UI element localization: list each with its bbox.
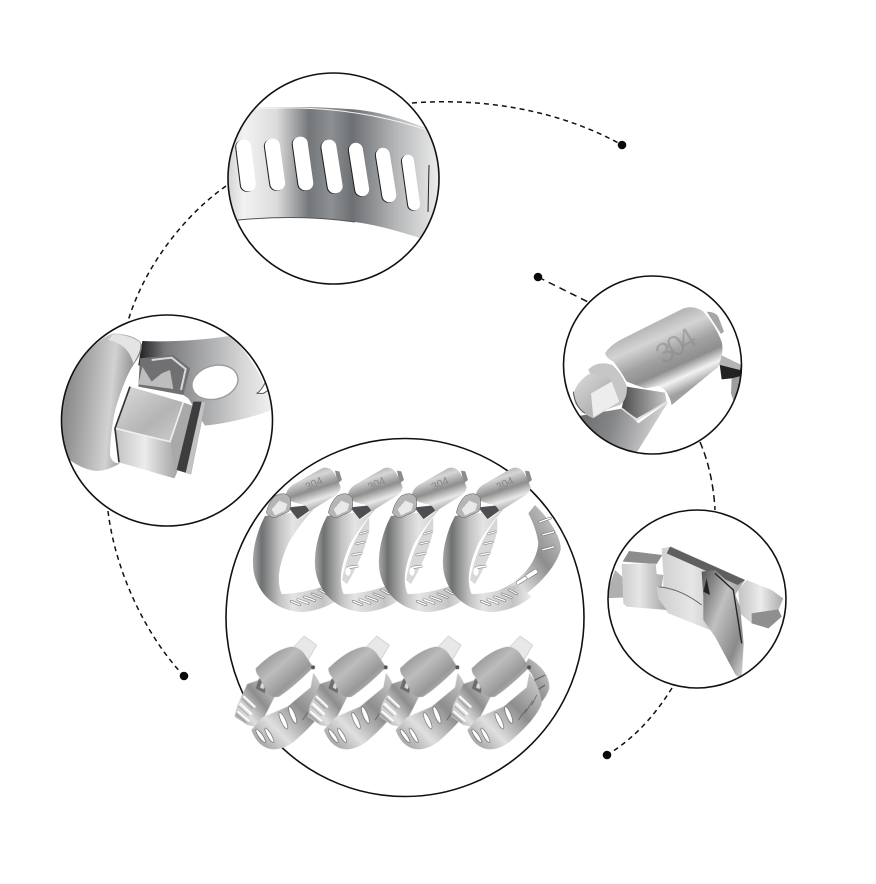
bottom row of clamps xyxy=(235,636,549,749)
back ring of fourth clamp xyxy=(492,505,561,607)
screw tip xyxy=(707,312,724,334)
panel: set of eight clamps xyxy=(226,438,584,796)
panel: perforated band close-up xyxy=(222,73,440,284)
circle outline xyxy=(62,315,272,526)
panel: hex nut close-up xyxy=(55,315,272,526)
inner shadow xyxy=(622,387,667,418)
panel: screw side close-up xyxy=(605,510,786,688)
circle outline xyxy=(564,276,742,454)
top strip xyxy=(623,551,662,564)
left block xyxy=(622,563,667,610)
main body xyxy=(657,547,745,631)
dot: bottom left xyxy=(180,672,188,680)
perforated steel band xyxy=(222,107,440,244)
screw nut xyxy=(738,580,783,628)
dot: bottom right xyxy=(603,751,611,759)
metal housing xyxy=(55,333,142,471)
tiny 304 stamps: 304 xyxy=(495,475,516,493)
lower band wedge xyxy=(580,402,668,452)
engraved 304: 304 xyxy=(650,322,702,371)
large circle outline xyxy=(226,438,584,796)
panel: 304 housing close-up xyxy=(564,276,742,454)
dashed connector: top circle to top dot xyxy=(412,102,622,145)
top row of clamps xyxy=(253,468,561,612)
infographic canvas xyxy=(60,72,787,798)
hex nut xyxy=(573,363,627,418)
dashed connector: right dot to upper right circle xyxy=(538,277,588,302)
dot: right xyxy=(534,273,542,281)
dark flap xyxy=(177,402,206,474)
tiny 304 stamps: 304 xyxy=(366,475,387,493)
dashed connector: left circle to bottom-left dot xyxy=(108,511,184,676)
tiny 304 stamps xyxy=(304,475,516,493)
band slots xyxy=(235,136,421,211)
left band xyxy=(608,570,624,598)
steel band with hole xyxy=(138,336,272,426)
tiny 304 stamps: 304 xyxy=(430,475,451,493)
housing body xyxy=(605,307,722,405)
partial eighth slot xyxy=(428,165,429,212)
band slot shadows xyxy=(234,136,420,212)
dashed connector: lower right circle to bottom dot xyxy=(607,688,672,755)
curved flap xyxy=(702,570,744,679)
dot: top xyxy=(618,141,626,149)
rear band end xyxy=(718,354,741,379)
dashed connector: between right circles xyxy=(700,442,715,510)
inner screw housing xyxy=(138,355,190,395)
tiny 304 stamps: 304 xyxy=(304,475,325,493)
circle outline xyxy=(228,73,439,284)
dashed connector: top circle to left circle xyxy=(128,186,226,321)
hex nut xyxy=(115,387,192,478)
circle outline xyxy=(608,510,786,688)
